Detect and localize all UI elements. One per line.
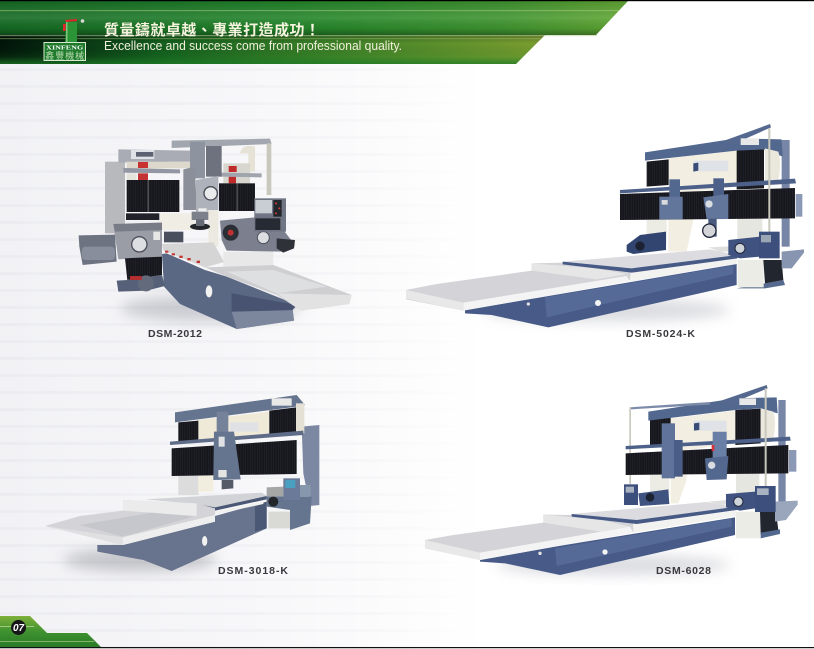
header subtitle: Excellence and success come from professional quality.	[104, 39, 402, 53]
label: DSM-6028: DSM-6028	[656, 565, 711, 577]
page number: 07	[13, 623, 24, 634]
machine: DSM-2012	[79, 139, 352, 329]
logo	[44, 19, 86, 61]
label: DSM-5024-K: DSM-5024-K	[626, 328, 695, 340]
label: DSM-2012: DSM-2012	[148, 328, 202, 340]
label: DSM-3018-K: DSM-3018-K	[218, 565, 288, 577]
header title: 質量鑄就卓越、專業打造成功！	[104, 21, 320, 39]
page background	[0, 64, 364, 649]
machine: DSM-6028	[425, 385, 798, 575]
machine: DSM-3018-K	[45, 395, 319, 572]
machine: DSM-5024-K	[406, 124, 804, 327]
footer band	[0, 616, 814, 648]
header banner	[0, 0, 814, 64]
logo: XINFENG	[46, 45, 84, 51]
page number	[11, 620, 26, 635]
logo: 鑫豐機械	[45, 50, 84, 61]
